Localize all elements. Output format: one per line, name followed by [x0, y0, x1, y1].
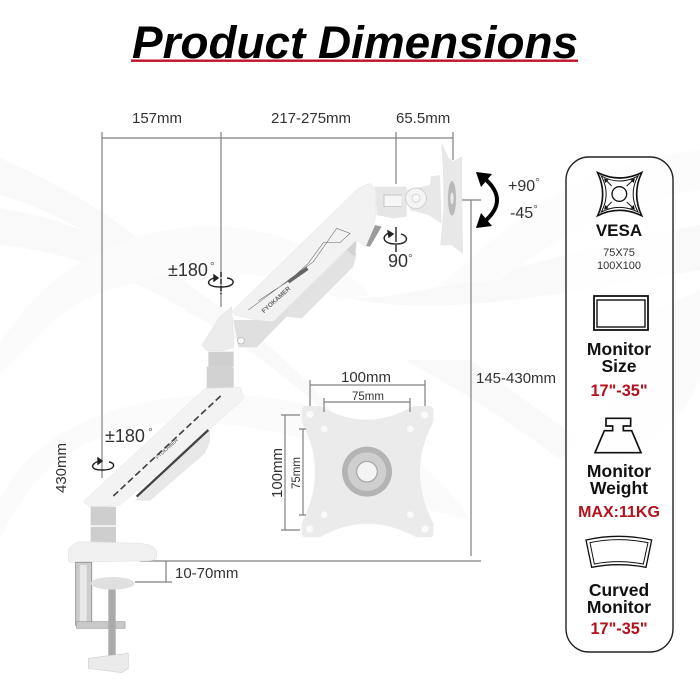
label: plus 90 degrees: ° [535, 175, 540, 189]
icon: weight [595, 418, 641, 453]
title: Product Dimensions [132, 17, 578, 68]
rotation label: plus or minus 180 degrees upper: ° [210, 259, 215, 273]
upper arm: FYOKAMER [261, 285, 293, 315]
icon: rotation lower [93, 458, 114, 470]
monitor arm product [68, 143, 463, 673]
tilt arrow and labels [476, 172, 540, 228]
lower arm and desk clamp [68, 367, 244, 673]
label: 217-275mm: 217-275mm [271, 110, 351, 127]
label: 145-430mm: 145-430mm [476, 370, 556, 387]
value: monitor weight: MAX:11KG [578, 504, 660, 521]
VESA plate diagram [269, 369, 433, 537]
value: monitor size: 17"-35" [590, 382, 648, 400]
heading: curved monitor: Monitor [587, 597, 651, 617]
heading: VESA: VESA [596, 221, 642, 240]
rotation label: plus or minus 180 degrees lower [93, 425, 153, 470]
plate [302, 406, 433, 537]
dimension lines and labels [53, 110, 556, 582]
rotation label: plus or minus 180 degrees lower: ° [148, 425, 153, 439]
heading: monitor size: Monitor [587, 339, 651, 359]
label: 65.5mm: 65.5mm [396, 110, 450, 127]
text: VESA sizes: 75X75 [603, 247, 635, 259]
label: 100mm height: 100mm [269, 448, 286, 498]
rotation label: plus or minus 180 degrees upper: ±180 [168, 260, 208, 280]
label: minus 45 degrees: ° [533, 202, 538, 216]
icon: monitor [594, 296, 648, 330]
label: 10-70mm: 10-70mm [175, 565, 238, 582]
label: 75mm width: 75mm [352, 391, 384, 403]
upper arm [202, 143, 463, 392]
icon: rotation swivel [384, 227, 406, 252]
rotation label: plus or minus 180 degrees upper [168, 259, 233, 294]
icon: curved monitor [586, 536, 652, 567]
heading: monitor size: Size [601, 356, 637, 376]
lower arm and desk clamp: FYOKAMER [155, 437, 180, 461]
label: 157mm: 157mm [132, 110, 182, 127]
rotation label: 90 degrees: ° [408, 251, 413, 265]
label: 430mm: 430mm [53, 443, 70, 493]
heading: curved monitor: Curved [589, 580, 649, 600]
heading: monitor weight: Weight [590, 478, 648, 498]
icon: VESA [598, 173, 642, 216]
heading: monitor weight: Monitor [587, 461, 651, 481]
icon: rotation upper [209, 272, 233, 294]
text: VESA sizes: 100X100 [597, 260, 641, 272]
label: 100mm width: 100mm [341, 369, 391, 386]
label: plus 90 degrees: +90 [508, 178, 535, 195]
label: minus 45 degrees: -45 [510, 205, 533, 222]
rotation label: plus or minus 180 degrees lower: ±180 [105, 426, 145, 446]
title red underline [131, 60, 578, 62]
panel: specifications [566, 157, 673, 652]
value: curved monitor size: 17"-35" [590, 620, 648, 638]
label: 75mm height: 75mm [291, 457, 303, 489]
rotation label: 90 degrees [384, 227, 413, 271]
rotation label: 90 degrees: 90 [388, 251, 408, 271]
